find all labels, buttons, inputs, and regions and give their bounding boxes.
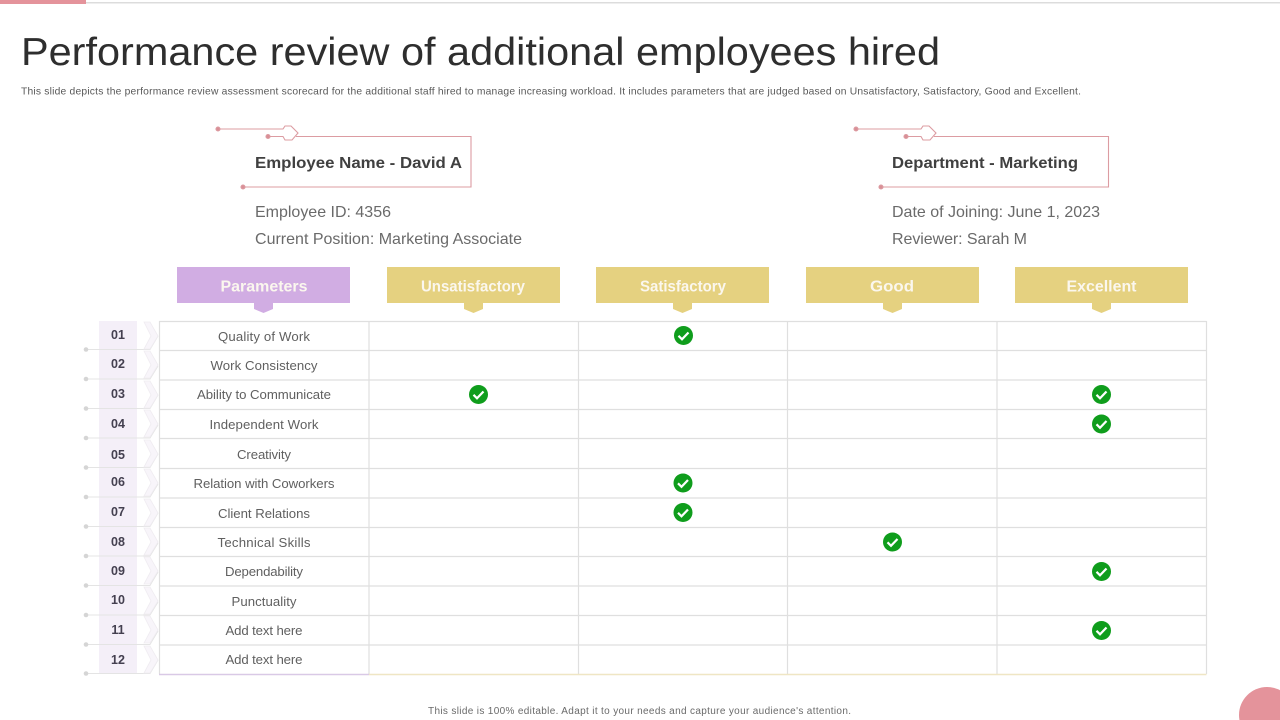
row number index: 01 — [111, 328, 125, 342]
table column headers — [177, 267, 1188, 313]
corner decorative circle — [1239, 687, 1280, 720]
row number index: 02 — [111, 357, 125, 371]
parameter labels: Add text here — [226, 623, 302, 638]
row number index: 05 — [111, 448, 125, 462]
department name: Department - Marketing — [892, 155, 1078, 172]
parameter labels: Ability to Communicate — [197, 387, 331, 402]
header: Parameters — [177, 267, 350, 313]
header: Excellent: Excellent — [1066, 278, 1137, 296]
header: Good: Good — [870, 278, 914, 296]
row number index: 12 — [111, 653, 125, 667]
header: Good — [806, 267, 979, 313]
row number index: 10 — [111, 593, 125, 607]
current position: Current Position: Marketing Associate — [255, 231, 522, 248]
parameter labels: Punctuality — [232, 594, 297, 609]
rating check marks — [469, 326, 1111, 640]
title: Performance review of additional employees hired — [21, 31, 940, 74]
header: Unsatisfactory: Unsatisfactory — [421, 278, 525, 296]
header: Parameters: Parameters — [220, 278, 308, 296]
parameter labels: Relation with Coworkers — [194, 476, 335, 491]
parameter labels — [194, 329, 335, 667]
panel: employee details — [216, 126, 522, 248]
parameter labels: Dependability — [225, 564, 303, 579]
row number index: 06 — [111, 475, 125, 489]
parameter labels: Add text here — [226, 652, 302, 667]
parameter labels: Client Relations — [218, 506, 310, 521]
employee id: Employee ID: 4356 — [255, 204, 391, 221]
row number index: 03 — [111, 387, 125, 401]
row number index: 04 — [111, 417, 125, 431]
row number index — [84, 321, 158, 676]
header: Satisfactory — [596, 267, 769, 313]
header: Satisfactory: Satisfactory — [640, 278, 726, 296]
panel: department details — [854, 126, 1108, 248]
parameter labels: Quality of Work — [218, 329, 310, 344]
date of joining: Date of Joining: June 1, 2023 — [892, 204, 1100, 221]
row number index: 07 — [111, 505, 125, 519]
reviewer: Reviewer: Sarah M — [892, 231, 1027, 248]
parameter labels: Independent Work — [210, 417, 319, 432]
row number index: 09 — [111, 564, 125, 578]
top accent bar — [0, 0, 1280, 4]
icon: arrow frame department — [854, 126, 1108, 189]
parameter labels: Technical Skills — [218, 535, 311, 550]
parameter labels: Work Consistency — [210, 358, 318, 373]
parameter labels: Creativity — [237, 447, 291, 462]
employee name: Employee Name - David A — [255, 155, 462, 172]
subtitle description: This slide depicts the performance review assessment scorecard for the additional staff hired to manage increasing workload. It includes parameters that are judged based on Unsatisfactory, Satisfactory, Good and Excellent. — [21, 86, 1081, 98]
footer note: This slide is 100% editable. Adapt it to your needs and capture your audience's attention. — [428, 706, 851, 717]
row number index: 11 — [111, 623, 125, 637]
header: Excellent — [1015, 267, 1188, 313]
header: Unsatisfactory — [387, 267, 560, 313]
scorecard table grid — [159, 321, 1206, 674]
row number index: 08 — [111, 535, 125, 549]
icon: arrow frame employee — [216, 126, 471, 189]
